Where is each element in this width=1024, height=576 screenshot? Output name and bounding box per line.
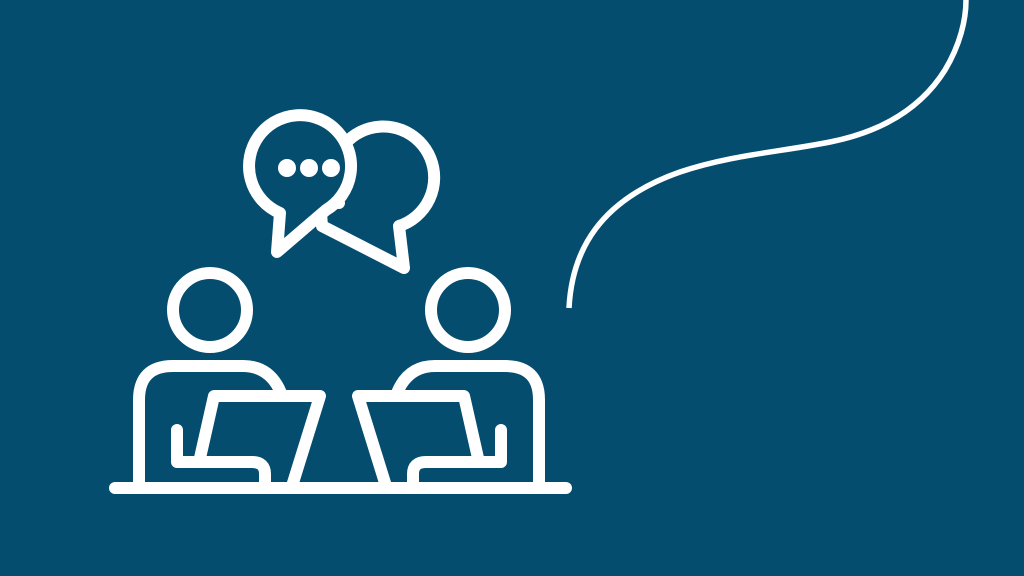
icon: speech bubbles xyxy=(249,115,434,268)
icon: right speech bubble xyxy=(320,127,434,268)
icon: left speech bubble with dots xyxy=(249,115,351,252)
icon: two people at laptops xyxy=(115,273,566,488)
right person xyxy=(358,273,539,486)
left person xyxy=(139,273,320,486)
decorative curve line xyxy=(569,0,966,308)
table line xyxy=(115,482,566,494)
